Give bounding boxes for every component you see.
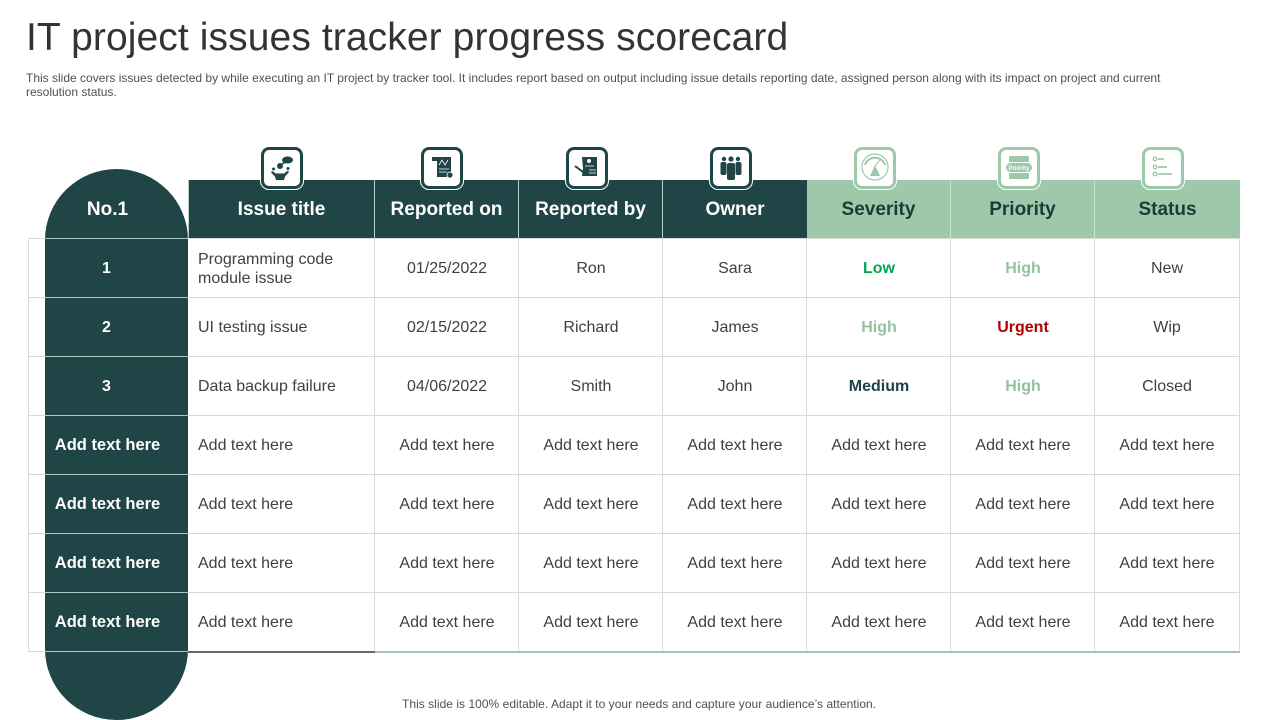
footer note: This slide is 100% editable. Adapt it to your needs and capture your audience’s attention. [402, 697, 876, 711]
header: Owner [663, 180, 807, 238]
table row 3: John [718, 378, 752, 394]
table row 3: Smith [571, 378, 611, 394]
table row 7: Add text here [543, 614, 639, 630]
icon: priority stack [998, 147, 1040, 189]
table row 5: Add text here [975, 496, 1071, 512]
table row 4: Add text here [975, 436, 1071, 454]
table row 6: Add text here [1119, 554, 1215, 572]
icon: group of people [710, 147, 752, 189]
table row 7: Add text here [831, 614, 927, 630]
header: Priority [951, 180, 1095, 238]
row labels [55, 260, 160, 631]
icon: status checklist [1142, 147, 1184, 189]
table row 5: Add text here [399, 496, 495, 512]
table row 1: Ron [576, 260, 606, 276]
table row 5: Add text here [543, 496, 639, 512]
table row 3: Medium [849, 378, 909, 394]
table row 1: 01/25/2022 [407, 260, 487, 276]
icon: report scroll [421, 147, 463, 189]
table row 4: Add text here [543, 436, 639, 454]
table row 7 [198, 614, 1215, 631]
table row 7: Add text here [1119, 614, 1215, 630]
table row 6: Add text here [975, 554, 1071, 572]
header: Issue title [188, 180, 375, 238]
table row 6: Add text here [687, 554, 783, 572]
table row 3 [198, 378, 1192, 395]
table row 7: Add text here [399, 614, 495, 630]
table row 3: 04/06/2022 [407, 378, 487, 394]
table row 7: Add text here [687, 614, 783, 630]
table row 1: Sara [718, 260, 752, 276]
table row 6 [198, 554, 1215, 572]
row labels: 1 [102, 260, 111, 276]
header: Reported by [519, 180, 663, 238]
table row 1: High [1005, 260, 1041, 276]
table row 4: Add text here [1119, 436, 1215, 454]
header: No.1: No.1 [87, 198, 128, 220]
table row 2: Richard [563, 318, 619, 336]
table row 2: High [861, 318, 897, 336]
table row 7: Add text here [198, 614, 293, 631]
table row 5 [198, 496, 1215, 513]
header: Severity [807, 180, 951, 238]
table row 4: Add text here [198, 437, 293, 454]
icon: person with speech bubble [261, 147, 303, 189]
header: Severity: Severity [842, 198, 915, 220]
table row 1: Programming code module issue [198, 250, 333, 286]
pill row separators [45, 238, 188, 652]
table row 7: Add text here [975, 614, 1071, 630]
table row 2: UI testing issue [198, 319, 307, 336]
row labels: 2 [102, 318, 111, 336]
table row 3: Data backup failure [198, 378, 336, 395]
table row 6: Add text here [831, 554, 927, 572]
table row 5: Add text here [687, 496, 783, 512]
table row 1: Low [863, 260, 895, 276]
table row 4: Add text here [399, 436, 495, 454]
table row 6: Add text here [198, 555, 293, 572]
table row 6: Add text here [543, 554, 639, 572]
title: IT project issues tracker progress scorecard [26, 16, 788, 59]
row labels: Add text here [55, 554, 160, 572]
header: Owner: Owner [705, 198, 765, 220]
header: Status [1095, 180, 1240, 238]
table row 2: 02/15/2022 [407, 318, 487, 336]
icon: reporter document [566, 147, 608, 189]
row labels: Add text here [55, 495, 160, 513]
left pill column [45, 169, 188, 720]
table row 1 [198, 250, 1184, 286]
table row 6: Add text here [399, 554, 495, 572]
table row 5: Add text here [1119, 496, 1215, 512]
table row 4: Add text here [831, 436, 927, 454]
icon: severity gauge [854, 147, 896, 189]
header: Priority: Priority [989, 198, 1056, 220]
table row 5: Add text here [198, 496, 293, 513]
row labels: Add text here [55, 613, 160, 631]
table row 3: Closed [1142, 378, 1192, 394]
header: Issue title: Issue title [238, 198, 325, 220]
table row 2: James [711, 318, 759, 336]
table row 2 [198, 318, 1181, 336]
row labels: 3 [102, 378, 111, 394]
table row 4 [198, 436, 1215, 454]
table row 1: New [1151, 260, 1183, 276]
table row 2: Wip [1153, 318, 1181, 336]
row labels: Add text here [55, 436, 160, 454]
description: This slide covers issues detected by while executing an IT project by tracker tool. It includes report based on output including issue details reporting date, assigned person along with its impact on project and current resolution status. [26, 71, 1160, 99]
table row 2: Urgent [997, 318, 1049, 336]
table row 4: Add text here [687, 436, 783, 454]
header: Status: Status [1138, 198, 1197, 220]
table row 3: High [1005, 378, 1041, 394]
header: Reported by: Reported by [535, 198, 646, 220]
header: Reported on: Reported on [391, 198, 502, 220]
header: Reported on [375, 180, 519, 238]
icon: priority stack: Priority [1008, 166, 1030, 172]
table row 5: Add text here [831, 496, 927, 512]
